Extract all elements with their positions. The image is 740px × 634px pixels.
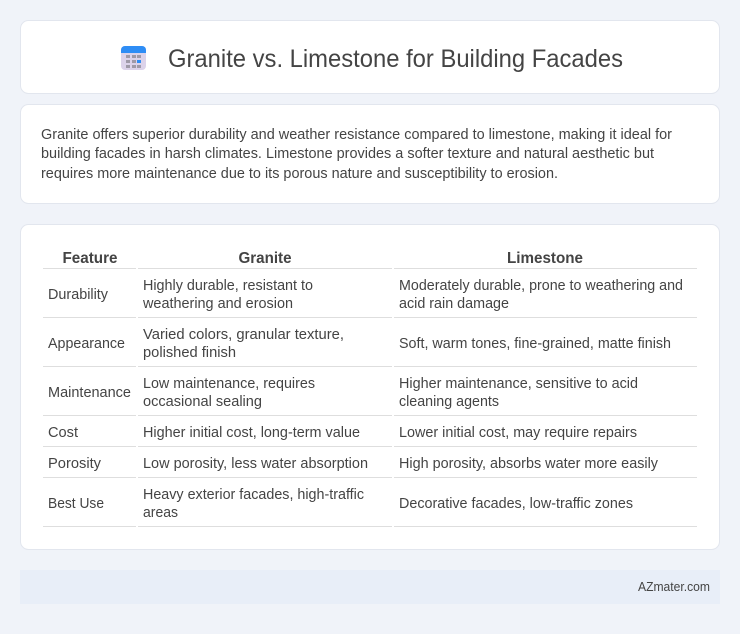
- row: best use: Decorative facades, low-traffic zones: [399, 496, 633, 512]
- row: cost: Higher initial cost, long-term value: [143, 425, 360, 441]
- row: cost: Cost: [48, 425, 78, 441]
- row: appearance: polished finish: [143, 345, 236, 361]
- row: durability: [48, 278, 683, 312]
- row: porosity: [48, 456, 659, 472]
- row: maintenance: Low maintenance, requires: [143, 376, 315, 392]
- row: durability: Durability: [48, 287, 109, 303]
- table header row: Feature: [62, 250, 118, 267]
- row: best use: [48, 487, 633, 521]
- panel: summary: [20, 104, 720, 204]
- row: best use: Heavy exterior facades, high-traffic: [143, 487, 364, 503]
- summary text: Granite offers superior durability and weather resistance compared to limestone, making it ideal for: [41, 127, 672, 143]
- row: durability: Highly durable, resistant to: [143, 278, 313, 294]
- table header row: [62, 250, 583, 267]
- row: cost: [48, 425, 637, 441]
- row: maintenance: cleaning agents: [399, 394, 499, 410]
- icon: calendar: [121, 46, 146, 70]
- row: porosity: Low porosity, less water absorption: [143, 456, 368, 472]
- row: maintenance: Higher maintenance, sensitive to acid: [399, 376, 638, 392]
- row: best use: areas: [143, 505, 178, 521]
- row: cost: Lower initial cost, may require repairs: [399, 425, 637, 441]
- row: porosity: Porosity: [48, 456, 102, 472]
- row: best use: Best Use: [48, 496, 104, 512]
- table header row: Granite: [238, 250, 292, 267]
- row: maintenance: occasional sealing: [143, 394, 262, 410]
- summary text: requires more maintenance due to its porous nature and susceptibility to erosion.: [41, 166, 558, 182]
- row: durability: Moderately durable, prone to weathering and: [399, 278, 683, 294]
- row: porosity: High porosity, absorbs water more easily: [399, 456, 659, 472]
- row: appearance: Soft, warm tones, fine-grained, matte finish: [399, 336, 671, 352]
- panel: comparison table: [20, 224, 720, 550]
- table header row: Limestone: [507, 250, 583, 267]
- row: maintenance: Maintenance: [48, 385, 131, 401]
- title: Granite vs. Limestone for Building Facades: [168, 46, 623, 73]
- row: durability: acid rain damage: [399, 296, 509, 312]
- row: maintenance: [48, 376, 638, 410]
- row: appearance: Varied colors, granular texture,: [143, 327, 344, 343]
- panel: header: [20, 20, 720, 94]
- summary text: [41, 127, 672, 182]
- summary text: building facades in harsh climates. Limestone provides a softer texture and natural aesthetic but: [41, 146, 654, 162]
- footer credit: AZmater.com: [638, 580, 710, 594]
- row: durability: weathering and erosion: [142, 296, 293, 312]
- row: appearance: [48, 327, 671, 361]
- row: appearance: Appearance: [48, 336, 125, 352]
- footer bar: [20, 570, 720, 604]
